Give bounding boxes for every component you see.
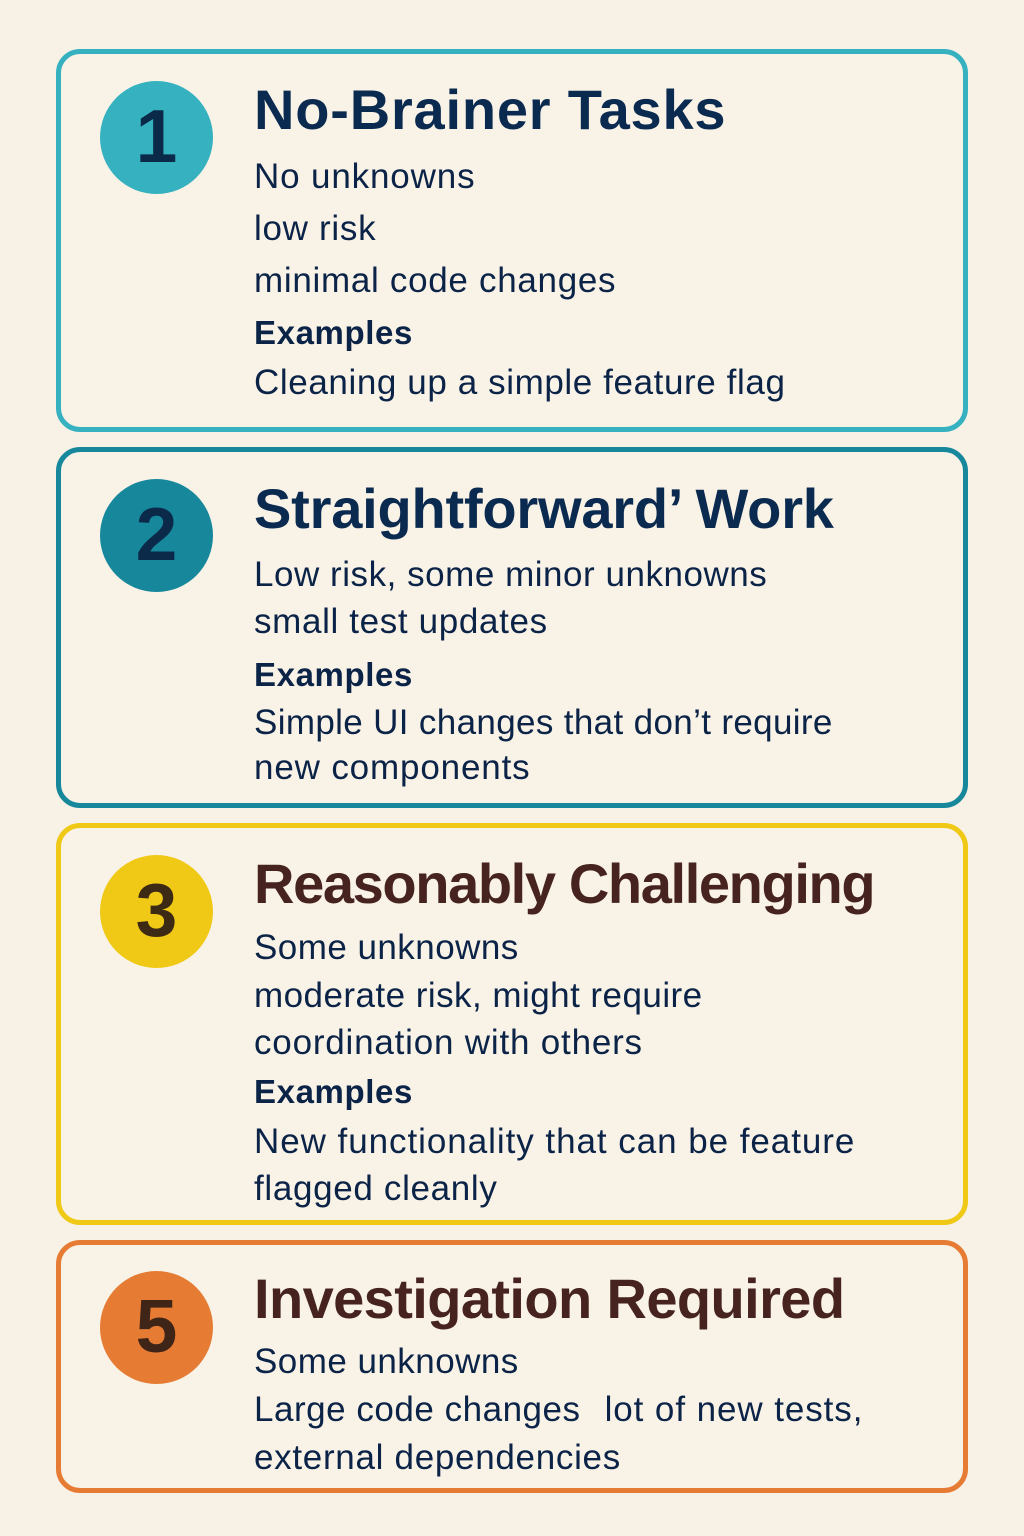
panel: card 5: [56, 1240, 968, 1493]
text block: card 3 example line 1: New functionality that can be feature: [254, 1122, 855, 1161]
icon: number 2: 2: [136, 492, 177, 576]
text block: card 2 examples label: Examples: [254, 656, 413, 693]
icon: number 5: 5: [136, 1284, 177, 1368]
text block: card 3 line 2: moderate risk, might require: [254, 976, 703, 1015]
text block: card 1 example: Cleaning up a simple feature flag: [254, 363, 786, 402]
heading: Investigation Required: Investigation Required: [254, 1267, 844, 1330]
text block: card 5 line 1: Some unknowns: [254, 1342, 519, 1381]
text block: card 5 line 2: Large code changes lot of new tests,: [254, 1390, 863, 1429]
heading: Straightforward Work: Straightforward’ Work: [254, 477, 834, 540]
icon: number 5: [100, 1271, 213, 1384]
text block: card 1 line 3: minimal code changes: [254, 261, 616, 300]
panel: card 2: [56, 447, 968, 808]
text block: card 3 example line 2: flagged cleanly: [254, 1169, 498, 1208]
text block: card 1 examples label: Examples: [254, 314, 413, 351]
heading: Reasonably Challenging: Reasonably Challenging: [254, 852, 874, 915]
text block: card 2 line 2: small test updates: [254, 602, 548, 641]
text block: card 3 line 3: coordination with others: [254, 1023, 643, 1062]
panel: card 3: [56, 823, 968, 1225]
icon: number 3: [100, 855, 213, 968]
icon: number 1: 1: [136, 94, 177, 178]
text block: card 1 line 2: low risk: [254, 209, 376, 248]
panel: card 1: [56, 49, 968, 432]
text block: card 2 example line 2: new components: [254, 748, 531, 787]
text block: card 3 line 1: Some unknowns: [254, 928, 519, 967]
text block: card 2 example line 1: Simple UI changes that don’t require: [254, 703, 833, 742]
text block: card 2 line 1: Low risk, some minor unknowns: [254, 555, 767, 594]
text block: card 5 line 3: external dependencies: [254, 1438, 621, 1477]
icon: number 3: 3: [136, 868, 177, 952]
icon: number 2: [100, 479, 213, 592]
text block: card 3 examples label: Examples: [254, 1073, 413, 1110]
heading: No-Brainer Tasks: No-Brainer Tasks: [254, 78, 726, 141]
text block: card 1 line 1: No unknowns: [254, 157, 475, 196]
icon: number 1: [100, 81, 213, 194]
